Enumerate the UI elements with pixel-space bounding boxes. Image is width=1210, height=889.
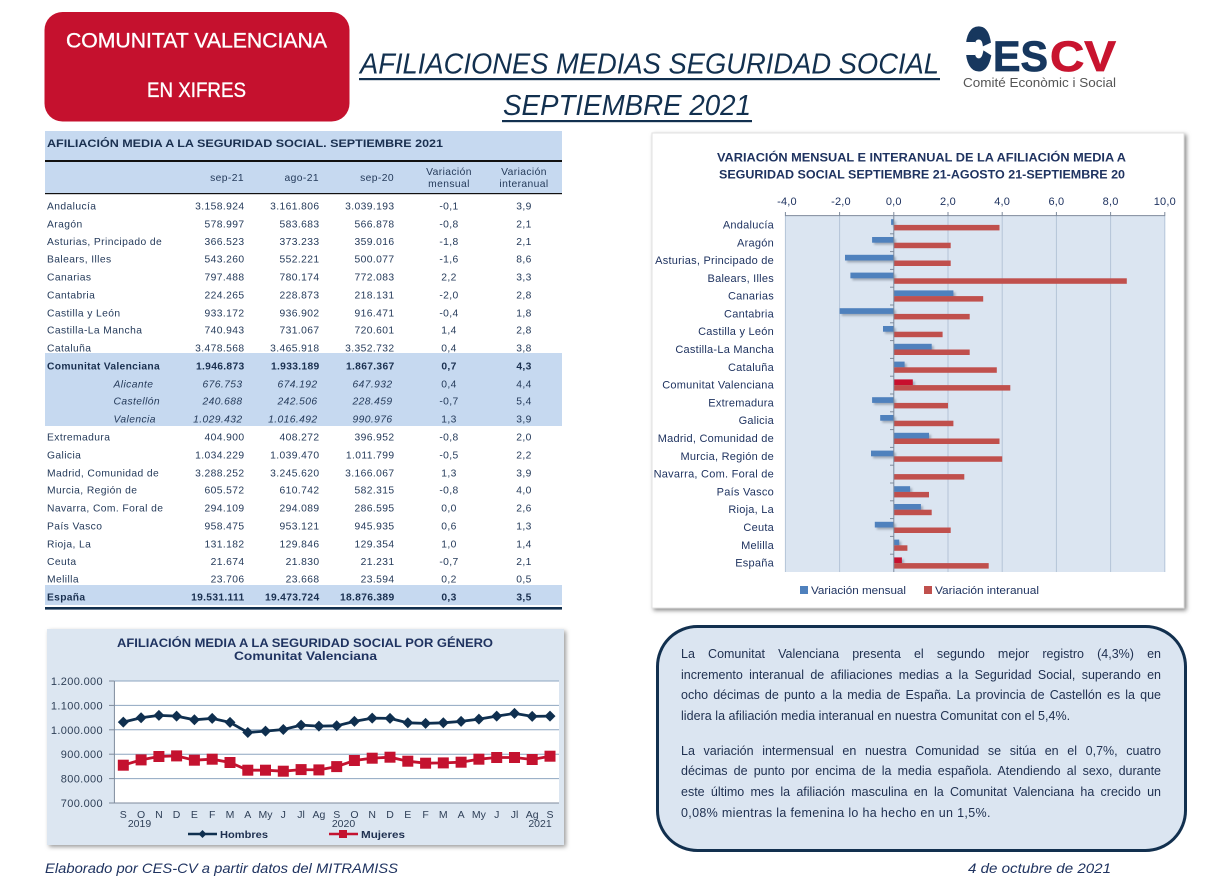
- row: Extremadura: 2,0: [516, 432, 532, 444]
- table column headers: sep-21: [210, 173, 244, 184]
- row: Aragón: [47, 220, 532, 230]
- row: Cantabria: [47, 290, 532, 302]
- x axis month labels: N: [155, 809, 163, 821]
- row: Madrid: 3.245.620: [270, 468, 320, 480]
- row: España: 3,5: [516, 592, 532, 604]
- row: Cataluña: 3.478.568: [195, 344, 244, 354]
- y axis labels: 900.000: [61, 749, 103, 761]
- row: Rioja: [47, 540, 532, 550]
- row: Castilla y León: Castilla y León: [47, 308, 121, 320]
- row: Melilla: 23.594: [361, 574, 394, 586]
- x axis labels: -4,0: [777, 196, 797, 208]
- x axis month labels: A: [244, 809, 251, 821]
- row: Asturias: 366.523: [204, 237, 244, 248]
- row: Castellón: [114, 396, 532, 408]
- category labels: Melilla: [741, 540, 775, 552]
- x axis labels: 6,0: [1048, 196, 1064, 208]
- row: Aragón: Aragón: [47, 220, 83, 230]
- row: Castellón: Castellón: [114, 396, 160, 408]
- row: Canarias: 797.488: [204, 272, 244, 284]
- row: Castellón: -0,7: [439, 396, 459, 408]
- row: Extremadura: 408.272: [279, 432, 320, 444]
- row: Rioja: 1,0: [441, 540, 457, 550]
- text block: commentary: este último mes la afiliación masculina en la Comunitat Valenciana ha crecido un: [681, 785, 1161, 799]
- row: Andalucía: 3,9: [516, 202, 532, 212]
- x axis month labels: M: [439, 809, 448, 821]
- row: Aragón: 2,1: [516, 220, 532, 230]
- x axis labels: 4,0: [994, 196, 1010, 208]
- y axis labels: 1.200.000: [51, 676, 103, 688]
- row: Castilla y León: 933.172: [204, 308, 244, 320]
- row: España: España: [47, 592, 85, 604]
- row: Cantabria: 224.265: [204, 290, 244, 302]
- category labels: Balears, Illes: [708, 273, 774, 285]
- row: Comunitat Valenciana: 1.946.873: [196, 362, 244, 372]
- x axis month labels: M: [226, 809, 234, 821]
- row: Melilla: 23.668: [286, 574, 320, 586]
- bar chart legend: Variación mensual: [811, 585, 906, 597]
- category labels: Aragón: [737, 237, 774, 249]
- row: Murcia: 582.315: [354, 486, 394, 496]
- x axis labels: 2,0: [940, 196, 956, 208]
- row: Castilla y León: -0,4: [439, 308, 459, 320]
- row: Comunitat Valenciana: 1.867.367: [346, 362, 394, 372]
- y axis labels: 1.100.000: [51, 700, 103, 712]
- logo: CES-CV: CV: [1050, 33, 1116, 81]
- row: Comunitat Valenciana: 0,7: [441, 362, 457, 372]
- bars: variación mensual: [840, 219, 953, 563]
- bar chart heading: SEGURIDAD SOCIAL SEPTIEMBRE 21-AGOSTO 21-SEPTIEMBRE 20: [719, 170, 1125, 182]
- main title: [358, 48, 940, 122]
- row: Madrid: 1,3: [441, 468, 457, 480]
- row: Canarias: 772.083: [354, 272, 394, 284]
- x axis month labels: 2021: [528, 818, 552, 830]
- row: Balears: 8,6: [516, 254, 532, 266]
- x axis month labels: My: [472, 809, 487, 821]
- row: Asturias: 373.233: [279, 237, 320, 248]
- x axis month labels: S: [333, 809, 340, 821]
- row: Melilla: 0,5: [516, 574, 532, 586]
- row: Navarra: [47, 504, 532, 514]
- row: Asturias: Asturias, Principado de: [47, 237, 162, 248]
- category labels: [654, 220, 775, 570]
- row: Ceuta: 21.231: [361, 557, 394, 568]
- y axis labels: 700.000: [61, 798, 103, 810]
- row: País Vasco: [47, 522, 532, 532]
- row: Galicia: 1.034.229: [195, 450, 244, 462]
- row: Castellón: 228.459: [351, 396, 392, 408]
- y axis labels: 800.000: [61, 774, 103, 786]
- row: Rioja: 1,4: [516, 540, 532, 550]
- footer date: 4 de octubre de 2021: [968, 860, 1111, 876]
- row: Aragón: 566.878: [354, 220, 394, 230]
- row: Melilla: 0,2: [441, 574, 457, 586]
- row: Galicia: 1.039.470: [270, 450, 320, 462]
- main title: AFILIACIONES MEDIAS SEGURIDAD SOCIAL: [358, 48, 939, 80]
- row: Navarra: 0,0: [441, 504, 457, 514]
- footer source note: Elaborado por CES-CV a partir datos del MITRAMISS: [45, 860, 399, 876]
- table column headers: ago-21: [285, 173, 319, 184]
- header badge: Comunitat Valenciana en xifres: COMUNITAT VALENCIANA: [66, 30, 327, 52]
- text block: commentary: incremento interanual de afiliaciones medias a la Seguridad Social, superando en: [681, 668, 1161, 682]
- row: Cataluña: 3.465.918: [270, 344, 320, 354]
- row: Castilla y León: 916.471: [354, 308, 394, 320]
- row: Asturias: -1,8: [439, 237, 459, 248]
- row: Murcia: 4,0: [516, 486, 532, 496]
- row: País Vasco: 958.475: [204, 522, 244, 532]
- table column headers: [210, 167, 549, 190]
- row: Canarias: 2,2: [441, 272, 457, 284]
- main title: SEPTIEMBRE 2021: [503, 90, 751, 122]
- x axis labels: 0,0: [886, 196, 902, 208]
- row: Castilla y León: [47, 308, 532, 320]
- row: Balears: -1,6: [439, 254, 459, 266]
- category labels: Canarias: [728, 291, 774, 303]
- x axis month labels: [120, 809, 554, 830]
- text block: commentary: 0,08% mientras la femenina lo ha hecho en un 1,5%.: [681, 806, 991, 820]
- row: Cantabria: -2,0: [439, 290, 459, 302]
- table heading: AFILIACIÓN MEDIA A LA SEGURIDAD SOCIAL. SEPTIEMBRE 2021: [47, 137, 443, 150]
- text block: commentary: décimas de punto por encima de la media española. Atendiendo al sexo, durante: [681, 764, 1161, 778]
- category labels: Navarra, Com. Foral de: [654, 469, 774, 481]
- logo: CES-CV: [955, 20, 1116, 90]
- row: Ceuta: 2,1: [516, 557, 532, 568]
- row: Castellón: 240.688: [201, 396, 242, 408]
- category labels: Murcia, Región de: [680, 451, 774, 463]
- category labels: Castilla y León: [698, 326, 774, 338]
- row: Ceuta: -0,7: [439, 557, 459, 568]
- header badge: Comunitat Valenciana en xifres: EN XIFRES: [147, 79, 246, 102]
- row: Canarias: 3,3: [516, 272, 532, 284]
- category labels: España: [735, 558, 775, 570]
- row: País Vasco: 945.935: [354, 522, 394, 532]
- x axis month labels: Ag: [526, 809, 539, 821]
- row: Canarias: Canarias: [47, 272, 91, 284]
- bar chart legend: [800, 585, 1039, 597]
- logo: CES-CV: C: [966, 20, 990, 80]
- row: Aragón: 578.997: [204, 220, 244, 230]
- row: Cantabria: 218.131: [354, 290, 394, 302]
- row: Murcia: [47, 486, 532, 496]
- row: Madrid: 3,9: [516, 468, 532, 480]
- row: Canarias: [47, 272, 532, 284]
- row: Navarra: 2,6: [516, 504, 532, 514]
- row: Andalucía: [47, 202, 532, 212]
- x axis month labels: S: [546, 809, 554, 821]
- x axis month labels: S: [120, 809, 127, 821]
- row: País Vasco: 953.121: [279, 522, 320, 532]
- row: Cantabria: 2,8: [516, 290, 532, 302]
- row: Madrid: Madrid, Comunidad de: [47, 468, 159, 480]
- x axis month labels: Ag: [312, 809, 325, 821]
- y axis labels: [51, 676, 103, 810]
- text block: commentary: La variación intermensual en nuestra Comunidad se sitúa en el 0,7%, cuatro: [681, 744, 1161, 758]
- row: Madrid: 3.288.252: [195, 468, 244, 480]
- table column headers: Variación: [501, 167, 547, 178]
- row: Melilla: [47, 574, 532, 586]
- row: Valencia: [114, 414, 532, 426]
- x axis month labels: J: [494, 809, 499, 821]
- row: Rioja: Rioja, La: [47, 540, 91, 550]
- category labels: Madrid, Comunidad de: [658, 433, 774, 445]
- row: Madrid: [47, 468, 532, 480]
- row: Cataluña: Cataluña: [47, 344, 91, 354]
- row: Comunitat Valenciana: Comunitat Valenciana: [47, 362, 160, 372]
- table: afiliación media por comunidad: [45, 131, 562, 610]
- x axis month labels: J: [281, 809, 286, 821]
- row: Murcia: Murcia, Región de: [47, 486, 137, 496]
- row: España: [47, 592, 532, 604]
- row: Cantabria: Cantabria: [47, 290, 95, 302]
- row: Cantabria: 228.873: [279, 290, 320, 302]
- row: Rioja: 131.182: [204, 540, 244, 550]
- row: Castilla y León: 1,8: [516, 308, 532, 320]
- x axis labels: [777, 196, 1176, 208]
- row: Galicia: 2,2: [516, 450, 532, 462]
- line: Mujeres: [123, 756, 550, 771]
- row: Comunitat Valenciana: 1.933.189: [271, 362, 320, 372]
- x axis month labels: E: [191, 809, 198, 821]
- row: Extremadura: [47, 432, 532, 444]
- row: Aragón: -0,8: [439, 220, 459, 230]
- row: Alicante: 674.192: [277, 380, 318, 390]
- panel: bar chart variación mensual e interanual: [652, 133, 1184, 608]
- text block: commentary: ocho décimas de punto a la media de España. La provincia de Castellón es la que: [681, 688, 1161, 702]
- row: Andalucía: Andalucía: [47, 202, 96, 212]
- category labels: Galicia: [739, 415, 775, 427]
- table column headers: mensual: [428, 179, 470, 190]
- row: Asturias: [47, 237, 532, 248]
- panel: line chart afiliación por género: [47, 629, 564, 845]
- row: Alicante: 676.753: [202, 380, 242, 390]
- row: Asturias: 2,1: [516, 237, 532, 248]
- row: Aragón: 583.683: [279, 220, 320, 230]
- x axis month labels: F: [209, 809, 215, 821]
- x axis labels: 10,0: [1154, 196, 1176, 208]
- row: Asturias: 359.016: [354, 237, 394, 248]
- row: Ceuta: Ceuta: [47, 557, 76, 568]
- row: País Vasco: País Vasco: [47, 522, 102, 532]
- header badge: Comunitat Valenciana en xifres: [44, 12, 350, 122]
- row: Castellón: 5,4: [516, 396, 532, 408]
- line chart heading: Comunitat Valenciana: [234, 651, 378, 663]
- row: Valencia: 1,3: [441, 414, 457, 426]
- x axis month labels: D: [386, 809, 394, 821]
- row: Alicante: [112, 380, 532, 390]
- text block: commentary: La Comunitat Valenciana presenta el segundo mejor registro (4,3%) en: [681, 647, 1161, 661]
- row: Cataluña: [47, 344, 532, 354]
- line chart legend: Mujeres: [361, 829, 405, 841]
- row: Alicante: 647.932: [352, 380, 392, 390]
- category labels: Comunitat Valenciana: [662, 380, 775, 392]
- row: Navarra: 294.089: [279, 504, 320, 514]
- row: Ceuta: 21.830: [286, 557, 320, 568]
- table column headers: interanual: [499, 179, 549, 190]
- row: Murcia: 605.572: [204, 486, 244, 496]
- x axis month labels: O: [350, 809, 358, 821]
- row: Galicia: 1.011.799: [346, 450, 394, 462]
- row: Galicia: -0,5: [439, 450, 459, 462]
- x axis month labels: N: [368, 809, 376, 821]
- row: Comunitat Valenciana: [47, 362, 532, 372]
- category labels: Castilla-La Mancha: [675, 344, 775, 356]
- category labels: Rioja, La: [728, 504, 775, 516]
- row: Balears: Balears, Illes: [47, 254, 112, 266]
- category labels: Andalucía: [723, 220, 775, 232]
- x axis labels: 8,0: [1103, 196, 1119, 208]
- x axis month labels: 2019: [128, 818, 151, 830]
- category labels: País Vasco: [717, 486, 774, 498]
- row: Cataluña: 0,4: [441, 344, 457, 354]
- row: España: 18.876.389: [340, 592, 394, 604]
- row: Melilla: 23.706: [211, 574, 244, 586]
- line chart heading: [117, 637, 493, 663]
- row: Castilla-La Mancha: Castilla-La Mancha: [47, 326, 142, 336]
- row: Ceuta: 21.674: [211, 557, 244, 568]
- logo: CES-CV: ES: [993, 33, 1048, 81]
- x axis month labels: Jl: [297, 809, 305, 821]
- y axis labels: 1.000.000: [51, 725, 103, 737]
- panel: text callout background: [658, 626, 1186, 850]
- row: Murcia: -0,8: [439, 486, 459, 496]
- row: Balears: 500.077: [354, 254, 394, 266]
- row: Ceuta: [47, 557, 532, 568]
- table column headers: Variación: [426, 167, 472, 178]
- row: Castellón: 242.506: [276, 396, 318, 408]
- row: Valencia: Valencia: [114, 414, 156, 426]
- row: España: 19.473.724: [265, 592, 320, 604]
- row: Comunitat Valenciana: 4,3: [516, 362, 532, 372]
- row: Balears: 552.221: [279, 254, 320, 266]
- x axis month labels: Jl: [511, 809, 518, 821]
- row: Castilla-La Mancha: 740.943: [204, 326, 244, 336]
- line: Hombres: [123, 713, 550, 732]
- row: Castilla-La Mancha: 720.601: [354, 326, 394, 336]
- bar chart heading: [717, 152, 1126, 182]
- row: Extremadura: 404.900: [204, 432, 244, 444]
- row: País Vasco: 0,6: [441, 522, 457, 532]
- row: Castilla-La Mancha: 1,4: [441, 326, 457, 336]
- row: Balears: 543.260: [204, 254, 244, 266]
- x axis month labels: 2020: [332, 818, 355, 830]
- category labels: Cataluña: [728, 362, 775, 374]
- row: España: 19.531.111: [191, 592, 244, 604]
- row: Andalucía: 3.158.924: [195, 202, 244, 212]
- row: Navarra: 294.109: [204, 504, 244, 514]
- row: País Vasco: 1,3: [516, 522, 532, 532]
- row: España: 0,3: [441, 592, 457, 604]
- category labels: Ceuta: [743, 522, 775, 534]
- line chart legend: Hombres: [220, 829, 268, 841]
- row: Valencia: 1.029.432: [193, 414, 242, 426]
- row: Melilla: Melilla: [47, 574, 79, 586]
- row: Madrid: 3.166.067: [345, 468, 394, 480]
- row: Balears: [47, 254, 532, 266]
- x axis month labels: A: [458, 809, 465, 821]
- row: Castilla-La Mancha: 731.067: [279, 326, 320, 336]
- bars: variación interanual: [894, 225, 1127, 569]
- category labels: Cantabria: [724, 308, 775, 320]
- row: Andalucía: 3.039.193: [345, 202, 394, 212]
- table column headers: sep-20: [360, 173, 394, 184]
- row: Navarra: 286.595: [354, 504, 394, 514]
- row: Rioja: 129.354: [354, 540, 394, 550]
- row: Castilla-La Mancha: [47, 326, 532, 336]
- row: Extremadura: -0,8: [439, 432, 459, 444]
- logo: CES-CV: Comité Econòmic i Social: [963, 75, 1116, 90]
- row: Canarias: 780.174: [279, 272, 320, 284]
- category labels: Extremadura: [708, 397, 775, 409]
- row: Extremadura: Extremadura: [47, 432, 110, 444]
- row: Valencia: 990.976: [352, 414, 392, 426]
- row: Andalucía: 3.161.806: [270, 202, 320, 212]
- row: Castilla-La Mancha: 2,8: [516, 326, 532, 336]
- x axis month labels: F: [422, 809, 429, 821]
- row: Rioja: 129.846: [279, 540, 320, 550]
- row: Andalucía: -0,1: [439, 202, 459, 212]
- row: Alicante: 0,4: [441, 380, 457, 390]
- x axis month labels: D: [173, 809, 181, 821]
- row: Cataluña: 3.352.732: [345, 344, 394, 354]
- bar chart heading: VARIACIÓN MENSUAL E INTERANUAL DE LA AFILIACIÓN MEDIA A: [717, 152, 1126, 164]
- row: Alicante: 4,4: [516, 380, 532, 390]
- row: Extremadura: 396.952: [354, 432, 394, 444]
- x axis month labels: O: [137, 809, 145, 821]
- text block: commentary: lidera la afiliación media interanual en nuestra Comunitat con el 5,4%.: [681, 709, 1070, 723]
- line chart legend: [188, 829, 405, 841]
- bar chart legend: Variación interanual: [935, 585, 1039, 597]
- x axis labels: -2,0: [831, 196, 851, 208]
- row: Murcia: 610.742: [279, 486, 320, 496]
- row: Alicante: Alicante: [112, 380, 153, 390]
- line chart heading: AFILIACIÓN MEDIA A LA SEGURIDAD SOCIAL POR GÉNERO: [117, 637, 493, 650]
- row: Valencia: 3,9: [516, 414, 532, 426]
- row: Galicia: Galicia: [47, 450, 81, 462]
- row: Navarra: Navarra, Com. Foral de: [47, 504, 163, 514]
- row: Castilla y León: 936.902: [279, 308, 320, 320]
- category labels: Asturias, Principado de: [655, 255, 774, 267]
- x axis month labels: E: [404, 809, 411, 821]
- row: Valencia: 1.016.492: [268, 414, 318, 426]
- x axis month labels: My: [258, 809, 273, 821]
- row: Galicia: [47, 450, 532, 462]
- row: Cataluña: 3,8: [516, 344, 532, 354]
